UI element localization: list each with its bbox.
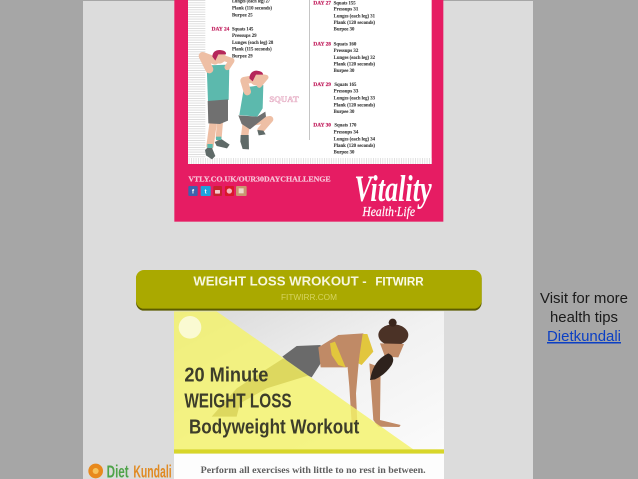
workout list: left column: Plank (115 seconds) (232, 46, 272, 53)
poster white sheet (188, 0, 432, 164)
workout list: right column: Plank (120 seconds) (334, 142, 375, 149)
sidebar link: Dietkundali: Dietkundali (547, 328, 621, 345)
figure: standing squat pose (203, 50, 232, 159)
image headline: 20 Minute (184, 364, 268, 387)
workout list: left column: Squats 145 (232, 26, 254, 32)
yellow triangle overlay (174, 311, 413, 449)
workout list: right column: Lunges (each leg) 32 (334, 54, 375, 61)
photo background (174, 311, 444, 450)
instruction text: Perform all exercises with little to no rest in between. (201, 466, 426, 476)
central content panel (83, 1, 533, 479)
logo: Diet Kundali (88, 462, 172, 479)
sidebar text: visit for more health tips (540, 290, 628, 345)
workout list: left column: Plank (110 seconds) (232, 5, 272, 12)
workout list: right column: DAY 27 (313, 0, 331, 6)
figure: lowered squat pose (238, 71, 270, 149)
workout list: right column: DAY 30 (313, 123, 331, 129)
column divider (308, 0, 311, 140)
workout list: right column: Burpee 30 (334, 150, 355, 156)
workout list: right column: Burpee 30 (334, 68, 355, 74)
workout list: right column: Pressups 31 (334, 7, 359, 13)
workout list: left column: Pressups 29 (232, 33, 257, 39)
workout list: right column: Burpee 30 (334, 109, 355, 115)
sidebar text: visit for more health tips: Visit for more (540, 290, 628, 307)
image headline (184, 364, 359, 438)
workout list: right column: DAY 29 (313, 82, 331, 88)
panel: 30 day challenge poster (174, 0, 443, 222)
logo: Vitality Health Life: Vitality (354, 169, 432, 210)
yellow stripe (174, 449, 444, 454)
image headline: Bodyweight Workout (189, 415, 359, 438)
logo: Vitality Health Life: Health·Life (361, 205, 415, 220)
workout list: left column: Lunges (each leg) 28 (232, 39, 274, 46)
workout list: right column: Pressups 32 (334, 48, 359, 54)
banner source: FITWIRR.COM (281, 292, 337, 302)
workout list: left column: DAY 24 (212, 26, 230, 32)
banner title: WEIGHT LOSS WROKOUT - (193, 274, 367, 289)
workout list: right column: Pressups 33 (334, 89, 359, 95)
brand badge (179, 316, 201, 339)
workout list: right column: Burpee 30 (334, 27, 355, 33)
workout list: right column: Lunges (each leg) 33 (334, 95, 375, 102)
photo: woman in plank (212, 319, 408, 427)
workout list: left column: Burpee 29 (232, 53, 253, 59)
workout list: right column: Plank (120 seconds) (334, 101, 375, 108)
image headline: WEIGHT LOSS (184, 389, 292, 412)
workout list: right column: Squats 165 (334, 82, 357, 88)
social media icons: f (192, 189, 195, 196)
banner brand: FITWIRR (375, 275, 424, 289)
banner: weight loss workout (136, 270, 482, 311)
poster pink frame (174, 0, 443, 222)
workout list: left column: Burpee 25 (232, 12, 253, 18)
logo: Vitality Health Life (354, 169, 432, 220)
hatch pattern (188, 0, 205, 164)
sidebar text: visit for more health tips: health tips (550, 309, 618, 326)
challenge URL: VTLY.CO.UK/OUR30DAYCHALLENGE (188, 174, 331, 183)
workout list: right column: DAY 28 (313, 41, 331, 47)
workout list: right column: Squats 170 (334, 123, 357, 129)
social media icons (188, 186, 247, 196)
exercise label: squat: SQUAT (269, 95, 299, 104)
social media icons: t (205, 190, 207, 196)
workout list: right column: Squats 160 (334, 41, 357, 47)
panel: 20 minute workout image (174, 311, 444, 479)
workout list: right column: Plank (120 seconds) (334, 19, 375, 26)
workout list: right column: Lunges (each leg) 31 (334, 12, 375, 19)
workout list: right column: Squats 155 (334, 0, 356, 6)
banner shape (136, 271, 482, 311)
workout list: right column: Lunges (each leg) 34 (334, 135, 375, 142)
white instruction strip (174, 454, 444, 479)
workout list: right column (313, 0, 375, 156)
workout list: left column (212, 0, 274, 59)
workout list: right column: Plank (120 seconds) (334, 61, 375, 68)
workout list: right column: Pressups 34 (334, 129, 359, 135)
